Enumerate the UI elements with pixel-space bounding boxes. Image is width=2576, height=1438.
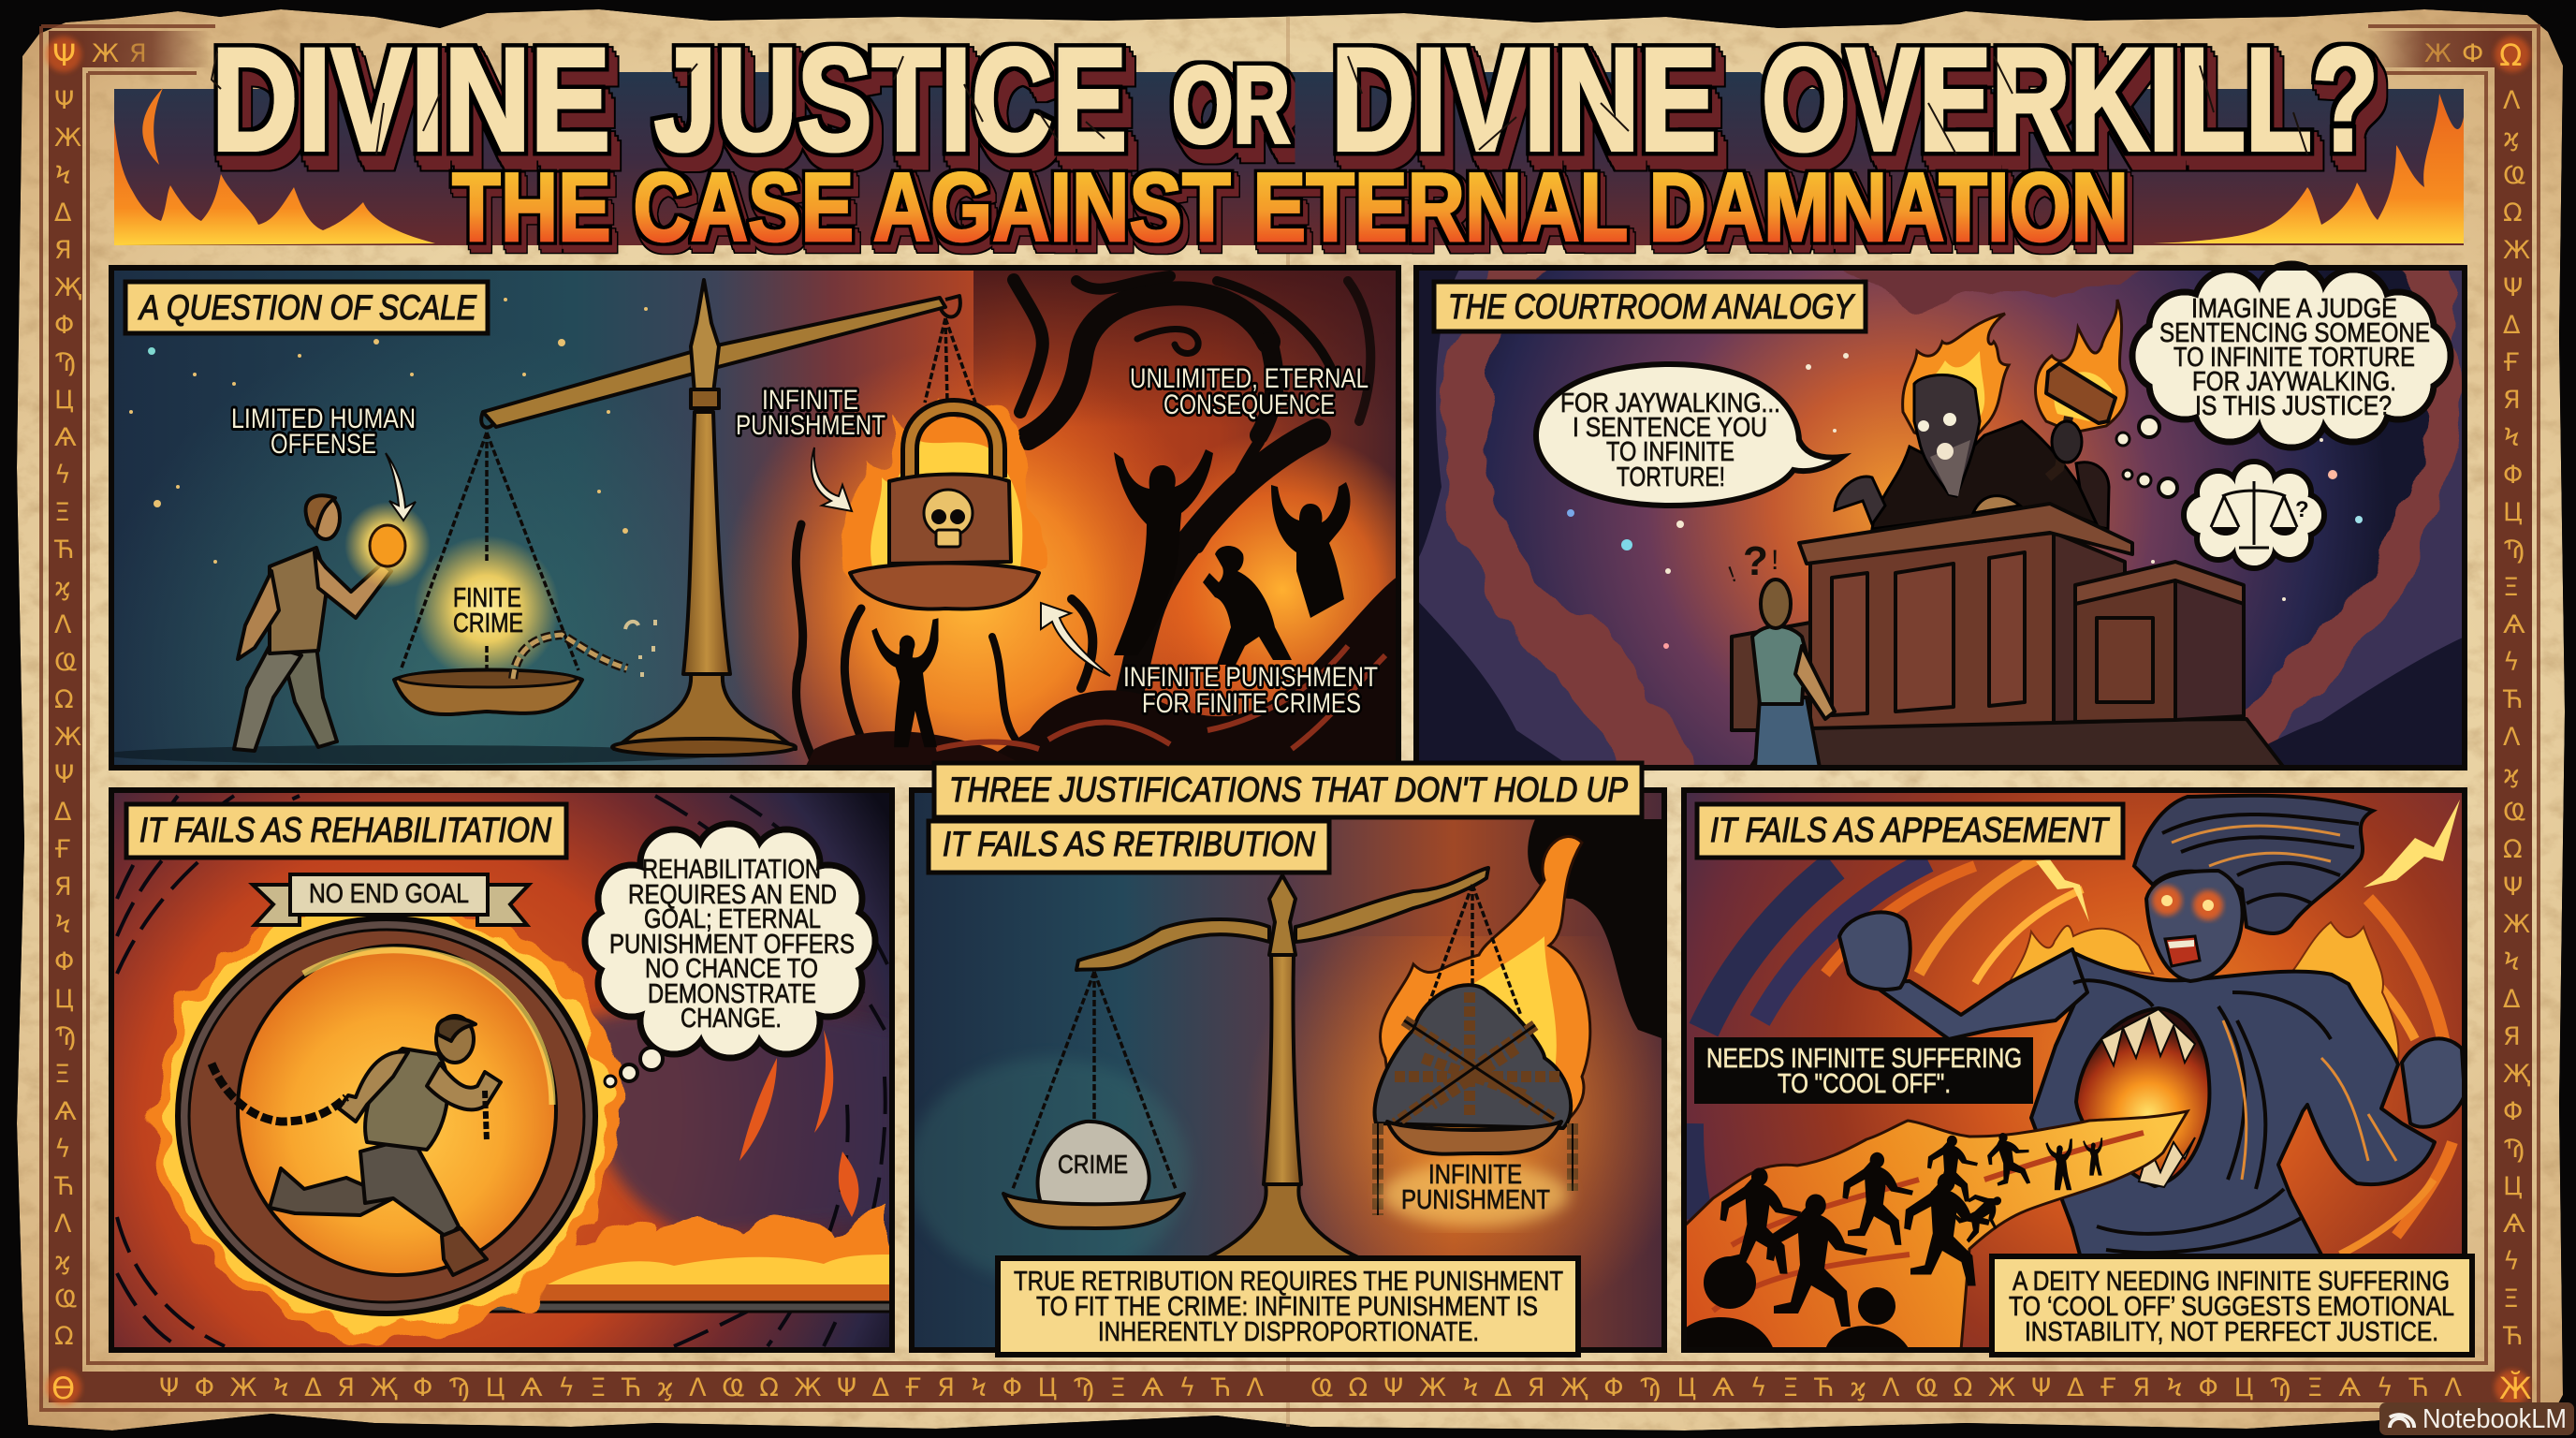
label: limited human offense: OFFENSE xyxy=(271,429,376,460)
section banner: three justifications xyxy=(934,763,1642,817)
caption: a deity needing infinite suffering: A DEITY NEEDING INFINITE SUFFERING xyxy=(2012,1267,2450,1297)
label: infinite punishment for finite crimes: INFINITE PUNISHMENT xyxy=(1123,662,1378,693)
thought bubble: rehabilitation: NO CHANCE TO xyxy=(645,954,818,984)
man holding orb xyxy=(234,495,391,751)
head xyxy=(2146,871,2243,981)
label: finite crime xyxy=(453,583,523,638)
arrow: limited offense xyxy=(386,453,416,521)
icon: exclamation marks xyxy=(1725,545,1778,588)
title word: justice: JUSTICE xyxy=(654,19,1127,182)
burning wheel xyxy=(153,893,621,1339)
scale: tilted beam and pillar xyxy=(481,280,960,756)
judge podium xyxy=(1732,533,2284,768)
ribbon: no end goal xyxy=(253,874,529,925)
caption: true retribution xyxy=(998,1258,1578,1355)
callout: needs infinite suffering: TO "COOL OFF". xyxy=(1778,1069,1951,1099)
thought bubble: is this justice: IS THIS JUSTICE? xyxy=(2195,391,2392,421)
small man looking up xyxy=(1752,580,1835,768)
title xyxy=(212,19,2378,182)
thought bubble: rehabilitation: DEMONSTRATE xyxy=(648,979,816,1009)
hair xyxy=(2134,796,2373,933)
angry deity xyxy=(1839,796,2465,1258)
speech bubble xyxy=(1536,364,1842,506)
panel: it fails as appeasement xyxy=(1684,790,2472,1355)
callout: needs infinite suffering: NEEDS INFINITE SUFFERING xyxy=(1706,1044,2022,1074)
panel: it fails as retribution xyxy=(908,790,1664,1355)
label: infinite punishment for finite crimes: FOR FINITE CRIMES xyxy=(1142,688,1361,719)
caption: true retribution: TRUE RETRIBUTION REQUIRES THE PUNISHMENT xyxy=(1014,1267,1563,1297)
panel: it fails as rehabilitation xyxy=(111,790,892,1350)
label: finite crime: FINITE xyxy=(453,583,521,613)
thought bubble: rehabilitation: REHABILITATION xyxy=(642,855,821,885)
teeth xyxy=(2101,1009,2195,1187)
corner runes: Ж xyxy=(92,39,119,68)
thought bubble: is this justice: FOR JAYWALKING. xyxy=(2192,367,2396,397)
section banner: three justifications: THREE JUSTIFICATIONS THAT DON'T HOLD UP xyxy=(949,770,1628,809)
label: finite crime: CRIME xyxy=(453,609,523,638)
title banner xyxy=(114,72,2464,245)
corner runes: Ω xyxy=(2499,37,2522,73)
flames behind load xyxy=(1380,837,1590,1133)
panel: a question of scale xyxy=(103,268,1398,768)
icon: flames right xyxy=(2153,94,2464,243)
icon: skull xyxy=(924,490,973,547)
thought bubble: scales icon: ? xyxy=(2295,497,2309,522)
left pan with crime rock: CRIME xyxy=(1058,1150,1128,1179)
heading: the courtroom analogy xyxy=(1434,282,1866,331)
heading: it fails as appeasement: IT FAILS AS APPEASEMENT xyxy=(1710,811,2110,849)
thought bubble: rehabilitation: GOAL; ETERNAL xyxy=(644,904,821,934)
black smoke xyxy=(796,276,1398,768)
title word: or: OR xyxy=(1172,44,1290,166)
nebula stars xyxy=(1567,353,2363,649)
title word: divine 2: DIVINE xyxy=(1331,19,1717,182)
lightning xyxy=(2036,800,2460,922)
label: infinite punishment xyxy=(736,385,886,441)
souls xyxy=(1684,1127,2102,1350)
heading: the courtroom analogy: THE COURTROOM ANALOGY xyxy=(1448,287,1855,326)
caption: a deity needing infinite suffering: INSTABILITY, NOT PERFECT JUSTICE. xyxy=(2025,1317,2438,1347)
corner runes: Ф xyxy=(2462,39,2483,68)
left arm xyxy=(1870,949,2087,1039)
icon: glowing orb xyxy=(344,502,431,588)
speech bubble: FOR JAYWALKING... xyxy=(1560,389,1780,418)
body fold lines xyxy=(2073,980,2331,1253)
rune glyphs bottom row left: ΨΦЖϞΔЯҖΦϠЦѦϟΞЋϗΛҨΩЖΨΔҒЯϞΦЦϠΞѦϟЋΛ xyxy=(159,1373,1265,1402)
icon: exclamation marks: ! xyxy=(1771,545,1778,576)
heading: a question of scale xyxy=(125,282,488,333)
label: infinite punishment: INFINITE xyxy=(762,385,858,416)
icon: exclamation marks: ! xyxy=(1725,562,1739,588)
body xyxy=(2031,952,2435,1258)
subtitle: THE CASE AGAINST ETERNAL DAMNATION xyxy=(452,154,2129,262)
flames small xyxy=(739,1030,858,1217)
label: infinite punishment for finite crimes xyxy=(1123,662,1378,719)
stars xyxy=(129,298,648,564)
callout: needs infinite suffering xyxy=(1694,1037,2033,1104)
judge hands xyxy=(1835,477,1885,524)
corner runes: Ψ xyxy=(52,37,76,73)
swirl arcs xyxy=(1690,843,2452,1255)
shoulder flames xyxy=(1998,922,2398,1077)
label: infinite punishment: PUNISHMENT xyxy=(1401,1185,1550,1215)
flames on track xyxy=(524,1208,892,1287)
heading: it fails as appeasement xyxy=(1697,804,2123,858)
watermark: notebooklm: NotebookLM xyxy=(2422,1404,2567,1434)
hanging chain xyxy=(485,1091,487,1142)
thought bubble: scales icon xyxy=(2123,462,2324,568)
thought bubble: rehabilitation: CHANGE. xyxy=(681,1004,782,1034)
heading: it fails as rehabilitation xyxy=(126,804,566,858)
thought bubble: rehabilitation: REQUIRES AN END xyxy=(628,880,837,910)
icon: flames left xyxy=(114,122,435,245)
flaming judge xyxy=(1835,314,2109,529)
cave walls xyxy=(1395,253,2481,786)
flaming gavel xyxy=(2036,300,2127,477)
running man xyxy=(270,1016,501,1275)
thought bubble: rehabilitation: PUNISHMENT OFFERS xyxy=(609,930,855,960)
rune glyphs left column: ΨЖϞΔЯҖΦϠЦѦϟΞЋϗΛҨΩЖΨΔҒЯϞΦЦϠΞѦϟЋΛϗҨΩ xyxy=(53,86,81,1351)
left pan with crime rock xyxy=(1003,972,1184,1228)
corner runes: Ж xyxy=(2424,39,2452,68)
caption: a deity needing infinite suffering xyxy=(1992,1256,2472,1355)
label: limited human offense xyxy=(231,404,416,460)
rune glyphs right column: ΛϗҨΩЖΨΔҒЯϞΦЦϠΞѦϟЋΛϗҨΩΨЖϞΔЯҖΦϠЦѦϟΞЋ xyxy=(2502,86,2530,1351)
speed lines xyxy=(117,796,887,1346)
thought bubble: is this justice xyxy=(2116,264,2451,448)
right pan with chained load xyxy=(1375,885,1573,1215)
label: limited human offense: LIMITED HUMAN xyxy=(231,404,416,434)
ground shadow xyxy=(103,745,721,764)
heading: a question of scale: A QUESTION OF SCALE xyxy=(138,288,477,327)
label: infinite punishment: INFINITE xyxy=(1428,1160,1522,1190)
caption: a deity needing infinite suffering: TO ‘COOL OFF’ SUGGESTS EMOTIONAL xyxy=(2009,1292,2454,1322)
left pan with finite crime glow xyxy=(394,433,655,714)
ribbon: no end goal: NO END GOAL xyxy=(309,879,469,909)
label: unlimited eternal consequence: UNLIMITED, ETERNAL xyxy=(1130,363,1368,394)
title word: overkill: OVERKILL? xyxy=(1762,19,2378,182)
judge bench top xyxy=(1799,504,2132,564)
arrow: infinite punishment for finite crimes xyxy=(1041,603,1110,676)
padlock xyxy=(910,407,998,477)
heading: it fails as rehabilitation: IT FAILS AS REHABILITATION xyxy=(139,811,551,849)
heading: it fails as retribution: IT FAILS AS RETRIBUTION xyxy=(943,825,1315,863)
silhouettes of the damned xyxy=(871,449,1351,747)
right fist xyxy=(2402,1038,2465,1127)
corner runes: Ѳ xyxy=(51,1371,75,1406)
caption: true retribution: INHERENTLY DISPROPORTIONATE. xyxy=(1098,1317,1479,1347)
corner runes: Ӂ xyxy=(2499,1371,2531,1406)
maw xyxy=(2076,1008,2209,1186)
icon: question mark: ? xyxy=(1743,538,1768,584)
chain xyxy=(212,1064,346,1122)
black smoke xyxy=(1528,819,1664,1039)
icon: flame wisp left xyxy=(142,88,163,165)
heading: it fails as retribution xyxy=(929,821,1329,873)
caption: true retribution: TO FIT THE CRIME: INFINITE PUNISHMENT IS xyxy=(1036,1292,1538,1322)
label: infinite punishment xyxy=(1382,1160,1569,1226)
thought bubble: rehabilitation xyxy=(585,824,875,1087)
label: unlimited eternal consequence xyxy=(1130,363,1368,420)
broken chain xyxy=(513,635,627,679)
speech bubble: I SENTENCE YOU xyxy=(1573,413,1767,443)
speech bubble: TORTURE! xyxy=(1617,462,1725,492)
speech bubble: TO INFINITE xyxy=(1606,437,1734,467)
title word: divine: DIVINE xyxy=(212,19,610,182)
arrow: infinite punishment xyxy=(812,448,852,511)
balance scale xyxy=(1076,868,1488,1259)
stream of souls xyxy=(1684,1111,2188,1350)
label: unlimited eternal consequence: CONSEQUENCE xyxy=(1164,389,1335,420)
thought bubble: is this justice: IMAGINE A JUDGE xyxy=(2191,294,2397,324)
label: infinite punishment: PUNISHMENT xyxy=(736,410,886,441)
right pan with burning lock xyxy=(850,318,1045,609)
panel: the courtroom analogy xyxy=(1395,253,2481,786)
rune glyphs bottom row right: ҨΩΨЖϞΔЯҖΦϠЦѦϟΞЋϗΛҨΩЖΨΔҒЯϞΦЦϠΞѦϟЋΛ xyxy=(1310,1373,2463,1402)
left fist xyxy=(1839,912,1910,990)
track xyxy=(419,1284,892,1303)
thought bubble: is this justice: SENTENCING SOMEONE xyxy=(2159,318,2430,348)
thought bubble: is this justice: TO INFINITE TORTURE xyxy=(2174,343,2415,373)
corner runes: Я xyxy=(129,39,147,68)
